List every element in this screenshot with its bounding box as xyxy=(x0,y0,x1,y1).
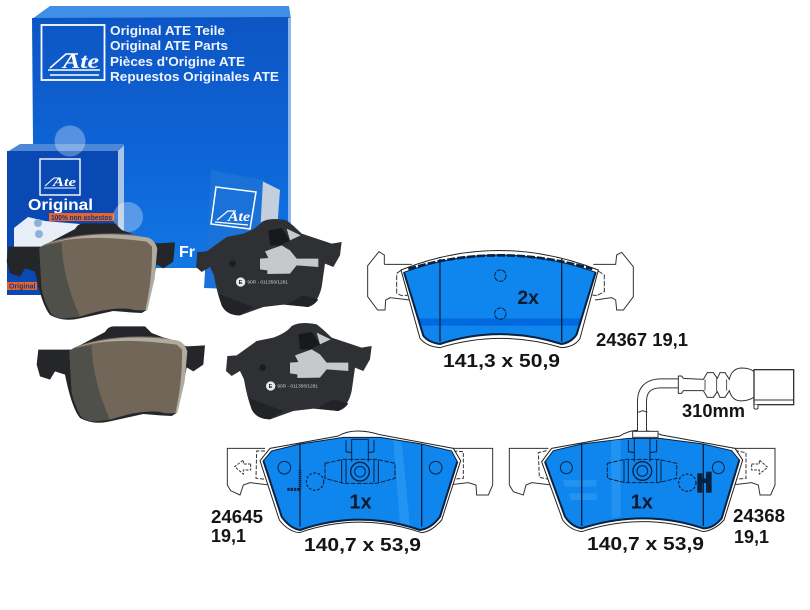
outer outline xyxy=(260,431,461,533)
approval mark: E xyxy=(269,384,273,390)
outer outline xyxy=(542,430,743,532)
box side text: Fr xyxy=(179,244,195,261)
box language lines xyxy=(110,23,279,84)
spring clip xyxy=(325,439,395,483)
orange bottom label: Original C xyxy=(9,284,42,290)
dimension: 140,7 x 53,9 left: 140,7 x 53,9 xyxy=(304,534,421,555)
rotation mark xyxy=(679,474,696,491)
thickness: 19,1 right: 19,1 xyxy=(734,527,769,547)
large box ATE logo xyxy=(42,25,104,80)
friction surface xyxy=(263,437,457,530)
part number: 24645: 24645 xyxy=(211,507,263,527)
box language lines: Original ATE Teile xyxy=(110,23,225,38)
approval mark xyxy=(236,277,288,287)
photo pad: backplate bottom xyxy=(226,323,372,419)
photo pad: friction side bottom xyxy=(37,326,205,423)
diagram: pad 24368 xyxy=(509,368,794,532)
leaflet on big box: Ate xyxy=(227,210,250,225)
photo pad: friction side top xyxy=(7,223,175,320)
edge emphasis xyxy=(263,461,457,530)
orange badge: 100% non asbestos xyxy=(51,215,112,222)
slots xyxy=(300,444,422,527)
friction surface xyxy=(404,255,596,344)
friction surface xyxy=(545,438,739,528)
arrow marker xyxy=(235,460,251,474)
cable length: 310mm: 310mm xyxy=(682,401,745,421)
box language lines: Pièces d'Origine ATE xyxy=(110,54,245,69)
darker band xyxy=(418,318,582,326)
photo pad: backplate top xyxy=(196,219,342,315)
thickness: 19,1 left: 19,1 xyxy=(211,526,246,546)
quantity: 1x xyxy=(349,491,372,513)
part number: 24367 19,1: 24367 19,1 xyxy=(596,330,688,350)
backing plate outline xyxy=(368,252,633,310)
part number: 24368: 24368 xyxy=(733,506,785,526)
large box ATE logo: Ate xyxy=(61,49,99,73)
approval mark: E xyxy=(239,280,243,286)
box language lines: Repuestos Originales ATE xyxy=(110,69,279,84)
quantity: 2x xyxy=(517,288,539,309)
small ATE box xyxy=(7,144,124,295)
backing plate outline xyxy=(509,448,775,495)
shade patches xyxy=(563,439,621,518)
large ATE box xyxy=(32,6,291,268)
shade stripe xyxy=(393,440,410,527)
diagram: pad 24645 xyxy=(227,431,493,533)
outer outline xyxy=(401,250,598,348)
watermarks xyxy=(54,126,143,232)
holes xyxy=(495,270,506,319)
top dashed edge xyxy=(408,255,592,269)
bottom edge xyxy=(404,272,596,344)
slots xyxy=(440,259,562,342)
box lid xyxy=(32,6,291,19)
approval mark: 90R - 011356/1281 xyxy=(247,279,288,285)
sensor plug xyxy=(754,370,794,405)
approval mark xyxy=(266,381,318,391)
rotation mark xyxy=(306,473,324,490)
dimension: 141,3 x 50,9: 141,3 x 50,9 xyxy=(443,350,560,371)
leaflet on big box xyxy=(204,170,280,290)
holes xyxy=(560,462,724,474)
approval mark: 90R - 011356/1281 xyxy=(277,383,318,389)
white pad illustration xyxy=(14,217,82,262)
edge emphasis xyxy=(545,460,739,528)
quantity: 1x xyxy=(631,491,653,513)
box front xyxy=(32,17,291,268)
backing plate outline xyxy=(227,448,493,495)
wear tick marks xyxy=(287,485,300,494)
small box logo xyxy=(40,159,80,195)
wear marks xyxy=(697,472,712,493)
wear sensor with cable xyxy=(633,368,794,437)
box language lines: Original ATE Parts xyxy=(110,38,228,53)
diagram: pad 24367 xyxy=(368,250,633,348)
spring clip xyxy=(607,438,677,483)
small box logo: Ate xyxy=(52,174,76,189)
dimension: 140,7 x 53,9 right: 140,7 x 53,9 xyxy=(587,533,704,554)
arrow marker xyxy=(752,460,768,474)
slots xyxy=(582,444,703,526)
holes xyxy=(278,461,442,474)
small box title: Original xyxy=(28,197,93,214)
